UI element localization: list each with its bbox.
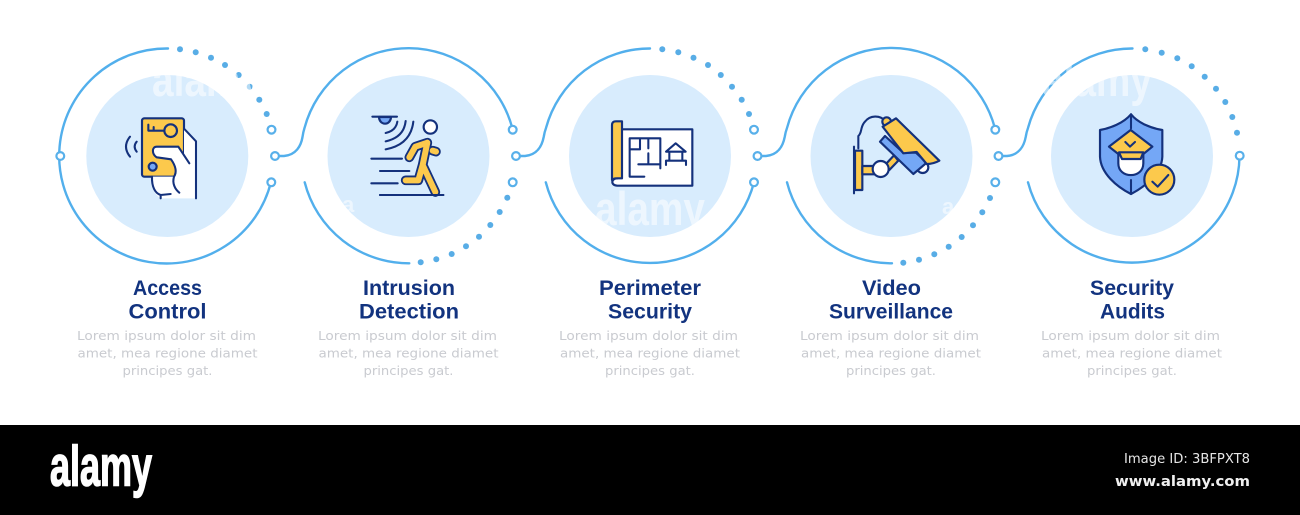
- heading 2 line 2: Detection: [359, 300, 459, 324]
- dotted arc 3: [659, 46, 752, 117]
- body text 1: amet, mea regione diamet: [78, 346, 258, 360]
- connector and upper ring 3: [520, 48, 650, 156]
- lower ring 2: [305, 182, 409, 263]
- body text 2: amet, mea regione diamet: [318, 346, 499, 360]
- faint watermarks: alamy: [1042, 53, 1152, 106]
- dotted arc 1: [177, 46, 270, 117]
- heading 5 line 2: Audits: [1100, 300, 1165, 324]
- nodes 5: [995, 152, 1244, 160]
- body text 3: [559, 328, 740, 378]
- body text 2: Lorem ipsum dolor sit dim: [318, 328, 497, 343]
- step 2: intrusion detection: [271, 48, 517, 378]
- step 4: video surveillance: [754, 48, 999, 378]
- heading 3 line 2: Security: [608, 300, 692, 324]
- step 5: security audits: [995, 46, 1244, 378]
- body text 1: [77, 328, 258, 378]
- body text 5: amet, mea regione diamet: [1042, 346, 1222, 360]
- body text 2: [318, 328, 499, 378]
- heading 4 line 2: Surveillance: [829, 300, 953, 324]
- faint watermarks: [152, 53, 1152, 235]
- icon: security camera: [854, 117, 939, 193]
- nodes 1: [56, 126, 275, 186]
- connector and upper ring 4: [761, 48, 995, 156]
- faint watermarks: alamy: [152, 53, 262, 106]
- image id: Image ID: 3BFPXT8: [1124, 451, 1250, 467]
- icon: floor plan blueprint: [612, 121, 692, 186]
- icon: guard shield with check badge: [1100, 114, 1174, 195]
- body text 5: principes gat.: [1087, 363, 1177, 378]
- ring 1: [59, 48, 271, 263]
- body text 4: [800, 328, 981, 378]
- body text 5: Lorem ipsum dolor sit dim: [1041, 328, 1220, 343]
- dotted arc 4: [900, 195, 993, 266]
- heading 1: Access: [133, 276, 202, 300]
- faint watermarks: alamy: [595, 182, 705, 235]
- dotted arc 2: [418, 195, 510, 265]
- heading 4: Video: [862, 276, 921, 300]
- body text 3: amet, mea regione diamet: [560, 346, 740, 360]
- faint watermarks: a: [942, 194, 955, 219]
- footer bar: [0, 425, 1300, 515]
- lower ring 5: [1028, 156, 1240, 263]
- lower ring 3: [546, 182, 754, 263]
- body text 3: Lorem ipsum dolor sit dim: [559, 328, 738, 343]
- nodes 3: [512, 126, 758, 186]
- website: www.alamy.com: [1115, 474, 1250, 490]
- step 1: access control: [56, 46, 275, 378]
- background disc 3: [569, 75, 731, 237]
- heading 3: Perimeter: [599, 276, 702, 300]
- body text 5: [1041, 328, 1222, 378]
- heading 5: Security: [1090, 276, 1174, 300]
- lower ring 4: [787, 182, 892, 263]
- background disc 1: [86, 75, 248, 237]
- body text 1: principes gat.: [122, 363, 212, 378]
- body text 4: Lorem ipsum dolor sit dim: [800, 328, 979, 343]
- nodes 4: [754, 126, 999, 186]
- body text 1: Lorem ipsum dolor sit dim: [77, 328, 256, 343]
- step 3: perimeter security: [512, 46, 758, 378]
- heading 1 line 2: Control: [128, 300, 206, 324]
- body text 2: principes gat.: [364, 363, 454, 378]
- background disc 2: [328, 75, 490, 237]
- background disc 4: [810, 75, 972, 237]
- icon: key card in hand: [126, 118, 197, 198]
- footer logo: alamy: [50, 434, 152, 498]
- connector and upper ring 5: [1002, 48, 1132, 156]
- background disc 5: [1051, 75, 1213, 237]
- heading 2: Intrusion: [363, 276, 455, 300]
- body text 4: principes gat.: [846, 363, 936, 378]
- nodes 2: [271, 126, 517, 186]
- connector and upper ring 2: [279, 48, 513, 156]
- dotted arc 5: [1142, 46, 1240, 136]
- body text 4: amet, mea regione diamet: [801, 346, 981, 360]
- faint watermarks: a: [342, 192, 355, 217]
- body text 3: principes gat.: [605, 363, 695, 378]
- icon: motion sensor and running figure: [371, 117, 443, 195]
